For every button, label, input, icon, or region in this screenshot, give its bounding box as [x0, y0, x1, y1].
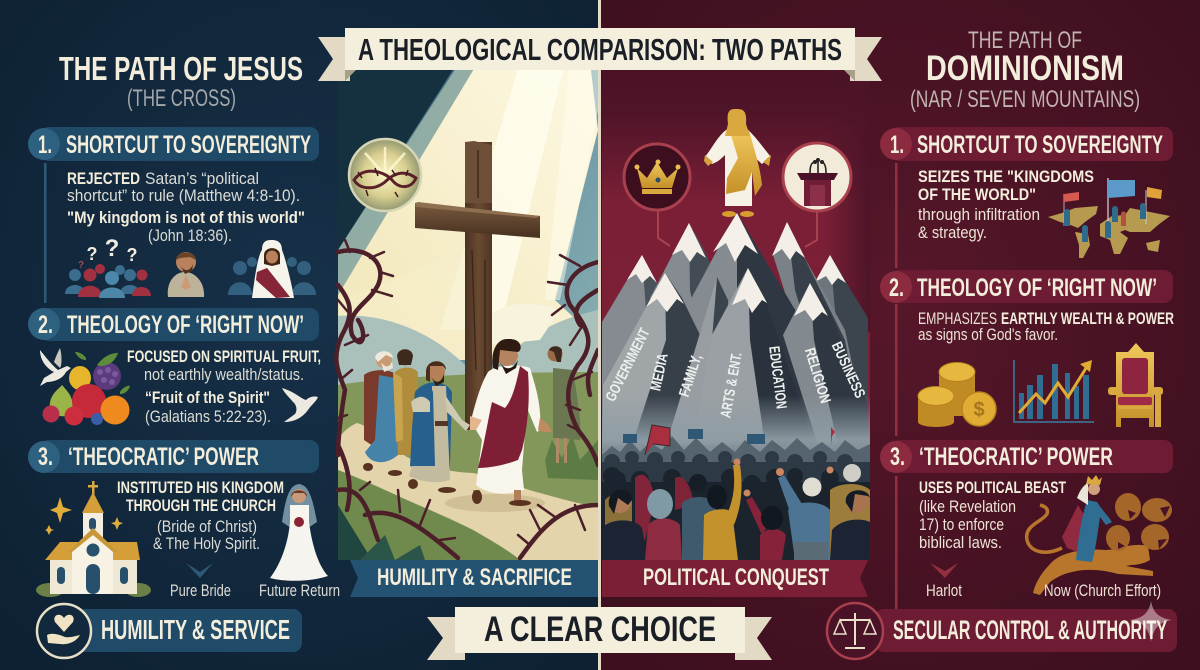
left takeaway: humility and service — [37, 604, 302, 658]
tan-coated man — [605, 494, 632, 560]
left section 3: theocratic power — [28, 440, 340, 600]
figure: green-robed onlooker — [548, 346, 581, 463]
figure: elder in brown robe — [363, 351, 403, 476]
right section 1: shortcut to sovereignty — [880, 127, 1173, 268]
icon: dove left — [40, 348, 71, 386]
hills — [338, 304, 598, 390]
man in dark suit right — [830, 490, 870, 560]
icon: crown medallion — [624, 144, 690, 246]
icon: confused crowd — [65, 235, 151, 298]
body text — [127, 348, 321, 426]
left section 1: shortcut to sovereignty — [28, 127, 319, 303]
mountain labels: ARTS & ENT. — [717, 351, 746, 419]
illustration: the cross scene — [336, 62, 598, 560]
body text — [67, 169, 305, 245]
right takeaway: secular control and authority — [827, 601, 1177, 659]
body text: & strategy. — [918, 223, 987, 242]
left section 2: theology of right now: THEOLOGY OF ‘RIGHT NOW’ — [67, 311, 304, 339]
panel: left navy background — [0, 0, 599, 670]
body text: 17) to enforce — [919, 516, 1004, 534]
icon: confused crowd: ? — [78, 260, 84, 271]
icon: dove right — [282, 388, 318, 422]
title ribbon: A THEOLOGICAL COMPARISON: TWO PATHS — [358, 32, 842, 67]
right heading: DOMINIONISM — [926, 49, 1124, 88]
banner: humility and sacrifice: HUMILITY & SACRIFICE — [377, 564, 572, 591]
body text — [918, 310, 1174, 344]
figure: disciple in yellow — [395, 349, 418, 455]
left section 2: theology of right now — [28, 308, 321, 426]
cross — [415, 141, 540, 430]
icon: confused crowd: ? — [105, 235, 119, 262]
figure: golden Christ on the summit — [704, 109, 771, 217]
right section 3: theocratic power: 3. — [890, 443, 905, 471]
thorn branches left — [336, 240, 458, 558]
mountain labels: EDUCATION — [765, 345, 790, 410]
left section 1: shortcut to sovereignty: 1. — [38, 131, 52, 159]
dark sky corner — [338, 62, 458, 250]
right heading: THE PATH OF — [968, 27, 1082, 54]
body text: (Bride of Christ) — [157, 518, 257, 536]
light rays — [338, 62, 598, 360]
right section 1: shortcut to sovereignty: 1. — [890, 131, 904, 159]
body text — [918, 167, 1094, 242]
grass and path — [338, 372, 598, 560]
icon: crown of thorns medallion — [349, 139, 421, 211]
icon: gold coins — [918, 362, 996, 427]
red-robed woman back row — [635, 475, 655, 560]
body text: “Fruit of the Spirit" — [145, 389, 270, 407]
icon: bride — [270, 484, 328, 581]
older man in tan coat — [826, 464, 870, 560]
body text: shortcut” to rule (Matthew 4:8-10). — [67, 186, 300, 205]
mountain labels: RELIGION — [801, 346, 834, 405]
body text — [919, 479, 1161, 600]
left heading: (THE CROSS) — [127, 85, 236, 112]
body text: not earthly wealth/status. — [144, 366, 304, 384]
chevron: harlot — [930, 563, 958, 578]
body text: as signs of God's favor. — [918, 326, 1058, 344]
icon: golden throne — [1108, 343, 1163, 427]
body text — [117, 479, 340, 600]
background crowd silhouettes — [602, 436, 870, 480]
mid crowd — [602, 451, 870, 482]
man in blue sweater with white hair — [776, 468, 830, 560]
icon: confused crowd: ? — [86, 244, 98, 264]
icon: harlot riding the beast — [1027, 475, 1172, 595]
body text: (John 18:36). — [148, 226, 232, 245]
figure: Jesus in white with red sash — [470, 339, 552, 506]
body text: (like Revelation — [919, 498, 1016, 516]
bottom ribbon: a clear choice — [427, 607, 772, 660]
body text: OF THE WORLD" — [918, 185, 1036, 204]
right section 2: theology of right now — [880, 270, 1174, 436]
chevron: pure bride — [186, 563, 213, 578]
banner: political conquest — [602, 560, 868, 597]
back mountain range — [602, 213, 868, 440]
body text: INSTITUTED HIS KINGDOM — [117, 479, 284, 497]
left section 3: theocratic power: ‘THEOCRATIC’ POWER — [68, 443, 259, 471]
body text: (Galatians 5:22-23). — [145, 408, 271, 426]
man in dark suit left — [603, 489, 648, 560]
body text: THROUGH THE CHURCH — [126, 497, 276, 515]
banner: humility and sacrifice — [350, 560, 598, 597]
center divider line — [598, 0, 601, 670]
body text: Pure Bride — [170, 582, 231, 600]
man in slate jacket — [682, 497, 716, 560]
mist band — [602, 395, 870, 455]
thorn branches right — [518, 255, 598, 558]
mountain labels: FAMILY, — [676, 352, 706, 399]
left section 1: shortcut to sovereignty: SHORTCUT TO SOVEREIGNTY — [66, 131, 311, 159]
icon: gold coins: $ — [973, 399, 985, 421]
right section 3: theocratic power: ‘THEOCRATIC’ POWER — [919, 443, 1113, 471]
woman in red, arm raised — [744, 490, 786, 560]
right heading — [910, 27, 1140, 113]
right section 2: theology of right now: 2. — [889, 274, 904, 302]
mountain labels: BUSINESS — [828, 339, 868, 401]
body text: Satan’s “political — [145, 169, 259, 188]
body text: Now (Church Effort) — [1044, 582, 1161, 600]
icon: heart in hand — [37, 604, 91, 658]
left section 3: theocratic power: 3. — [38, 443, 53, 471]
body text: "My kingdom is not of this world" — [67, 208, 305, 227]
icon: fruit cluster — [42, 352, 130, 426]
sparkle mark — [1130, 601, 1172, 642]
left takeaway: humility and service: HUMILITY & SERVICE — [101, 614, 290, 645]
left heading: THE PATH OF JESUS — [59, 50, 303, 87]
body text: EMPHASIZES — [918, 310, 997, 328]
illustration: seven mountains scene — [602, 62, 870, 560]
icon: Jesus with followers — [228, 240, 316, 298]
icon: confused crowd: ? — [126, 245, 138, 265]
title ribbon — [318, 28, 882, 81]
front mountain peaks — [603, 268, 868, 445]
left section 2: theology of right now: 2. — [38, 311, 53, 339]
body text: & The Holy Spirit. — [153, 535, 260, 553]
crowd with flags — [602, 425, 870, 560]
mountain labels: MEDIA — [647, 352, 672, 392]
woman in hijab and red — [645, 489, 682, 560]
figure: disciple in blue robe — [408, 361, 470, 493]
body text: SEIZES THE "KINGDOMS — [918, 167, 1094, 186]
body text: biblical laws. — [919, 534, 1002, 552]
left heading — [59, 50, 303, 112]
bottom ribbon: a clear choice: A CLEAR CHOICE — [484, 610, 716, 649]
body text: Future Return — [259, 582, 340, 600]
mountain labels — [602, 325, 868, 419]
woman in yellow dress, arm raised — [703, 458, 742, 560]
right section 3: theocratic power — [880, 440, 1173, 610]
body text: through infiltration — [918, 205, 1040, 224]
body text: USES POLITICAL BEAST — [919, 479, 1066, 497]
icon: scales of justice — [827, 603, 883, 659]
icon: rising bar chart — [1014, 360, 1094, 422]
mountain labels: GOVERNMENT — [602, 325, 654, 404]
banner: political conquest: POLITICAL CONQUEST — [643, 564, 829, 591]
icon: church — [36, 481, 151, 597]
icon: podium medallion — [783, 143, 851, 247]
icon: praying figure — [168, 252, 204, 297]
body text: Harlot — [926, 582, 962, 600]
body text: FOCUSED ON SPIRITUAL FRUIT, — [127, 348, 321, 366]
icon: world map with flags — [1048, 178, 1170, 258]
flags — [623, 425, 835, 455]
panel: right maroon background — [599, 0, 1200, 670]
body text: REJECTED — [67, 169, 140, 188]
